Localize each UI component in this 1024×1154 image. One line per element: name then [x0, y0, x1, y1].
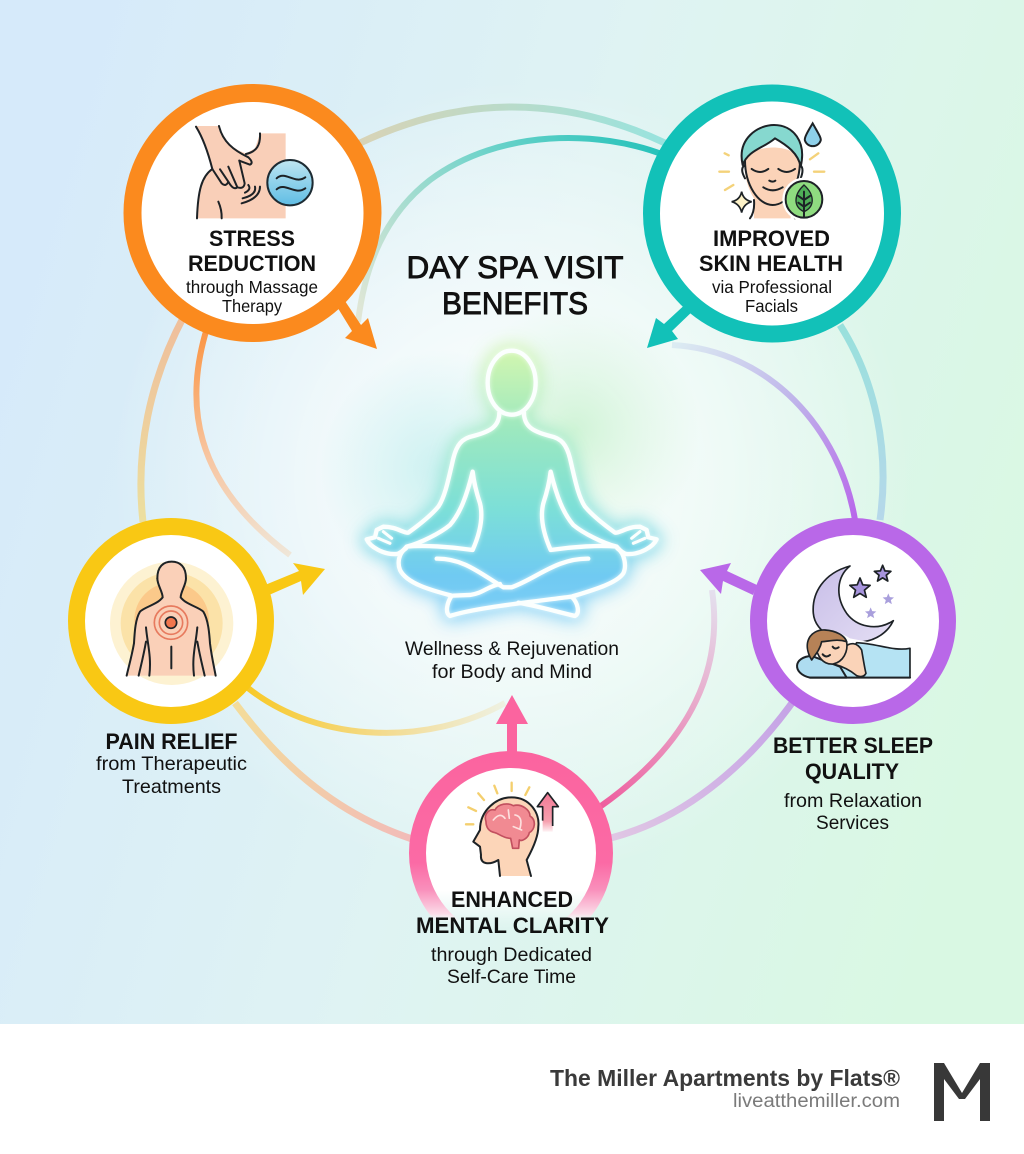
caption: wellness: for Body and Mind	[432, 661, 592, 683]
title: DAY SPA VISIT	[406, 249, 624, 285]
footer url: liveatthemiller.com	[733, 1091, 900, 1112]
ring: purple	[758, 526, 948, 716]
arrow: purple	[700, 563, 757, 595]
logo: M	[934, 1063, 990, 1121]
subtext line 2: Therapy	[222, 296, 282, 316]
central glow	[320, 305, 700, 590]
title	[406, 249, 624, 321]
connector: sleep to mental clarity outer arc	[611, 696, 797, 838]
ring: orange	[132, 93, 372, 333]
connector: stress to pain relief outer arc	[141, 316, 184, 522]
connector: pain relief to centre arc	[248, 688, 505, 733]
connector: skin to centre inner arc	[358, 138, 664, 322]
ring: teal	[652, 93, 892, 334]
ring: yellow	[76, 526, 266, 716]
subtext: from Relaxation	[784, 790, 922, 812]
heading: ENHANCED	[451, 887, 573, 912]
subtext line 2: Services	[816, 812, 889, 834]
heading line 2: SKIN HEALTH	[699, 251, 843, 276]
subtext: through Massage	[186, 277, 318, 297]
subtext: via Professional	[712, 277, 832, 297]
connector: mental clarity to centre arc	[601, 590, 714, 806]
ring: pink fading	[418, 760, 604, 946]
subtext: through Dedicated	[431, 944, 592, 966]
icon: facial	[719, 123, 826, 221]
subtext line 2: Self-Care Time	[447, 966, 576, 988]
caption: wellness: Wellness & Rejuvenation	[405, 638, 619, 660]
connector: skin to sleep outer arc	[840, 325, 883, 520]
subtext: from Therapeutic	[96, 753, 247, 775]
connector: stress to centre inner arc	[196, 328, 290, 555]
caption: wellness	[405, 638, 619, 683]
arrow: yellow	[265, 563, 325, 595]
connector: sleep to centre inner arc	[672, 345, 855, 520]
panel: improved skin health	[652, 93, 892, 334]
subtext line 2: Facials	[745, 296, 798, 316]
panel: pain relief	[76, 526, 266, 798]
heading: BETTER SLEEP	[773, 733, 933, 758]
heading line 2: REDUCTION	[188, 251, 316, 276]
panel: enhanced mental clarity	[416, 760, 609, 988]
footer panel	[0, 1024, 1024, 1154]
arrow: orange	[336, 298, 377, 349]
heading: IMPROVED	[713, 226, 830, 251]
icon: back pain	[110, 562, 233, 685]
title: BENEFITS	[442, 285, 588, 321]
panel: stress reduction	[132, 93, 372, 333]
heading line 2: QUALITY	[805, 759, 899, 784]
arrow: teal	[647, 300, 697, 348]
icon: meditating figure	[367, 351, 657, 616]
icon: sleeping person	[797, 565, 910, 678]
subtext line 2: Treatments	[122, 776, 221, 798]
icon: brain	[466, 783, 558, 876]
connector: mental clarity to pain relief outer arc	[235, 703, 412, 839]
icon: massage hand	[196, 126, 313, 218]
heading: STRESS	[209, 226, 295, 251]
footer brand name: The Miller Apartments by Flats®	[550, 1065, 900, 1091]
connector: stress to skin outer arc	[360, 107, 665, 143]
heading: PAIN RELIEF	[106, 729, 238, 754]
arrow: pink	[496, 695, 528, 752]
panel: better sleep quality	[758, 526, 948, 834]
heading line 2: MENTAL CLARITY	[416, 913, 609, 938]
